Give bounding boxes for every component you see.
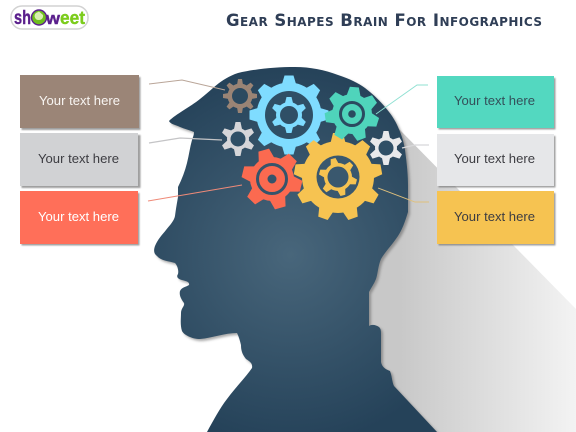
head silhouette [154, 67, 437, 432]
title: Gear Shapes Brain For Infographics [226, 11, 542, 30]
head shadow edge [156, 69, 439, 432]
gear: blue [250, 76, 328, 154]
connector: yellow [378, 188, 429, 202]
logo: showeet: w [45, 9, 61, 28]
box: yellow: Your text here [454, 209, 535, 224]
box: light grey [437, 134, 556, 188]
connector: brown [149, 80, 225, 90]
logo: showeet: eet [60, 8, 85, 28]
box: red [20, 191, 140, 246]
logo: showeet [11, 6, 88, 29]
box: light grey: Your text here [454, 151, 535, 166]
box: teal: Your text here [454, 93, 535, 108]
box: grey: Your text here [38, 151, 119, 166]
box: brown [20, 75, 140, 130]
box: grey [20, 133, 140, 188]
gear: yellow [293, 133, 383, 221]
box: teal [437, 76, 556, 130]
gear: red [235, 142, 309, 216]
gear: brown [223, 79, 257, 113]
connector: red [148, 185, 242, 201]
box: brown: Your text here [39, 93, 120, 108]
box: red: Your text here [38, 209, 119, 224]
gear: green [322, 85, 382, 144]
logo: showeet: sh [14, 8, 31, 29]
gear: light grey [221, 122, 255, 156]
connector: grey [149, 138, 222, 143]
connector: white [402, 145, 429, 148]
connector: green [376, 85, 428, 114]
gear: white [369, 131, 403, 165]
long shadow [350, 128, 576, 432]
box: yellow [437, 191, 556, 246]
